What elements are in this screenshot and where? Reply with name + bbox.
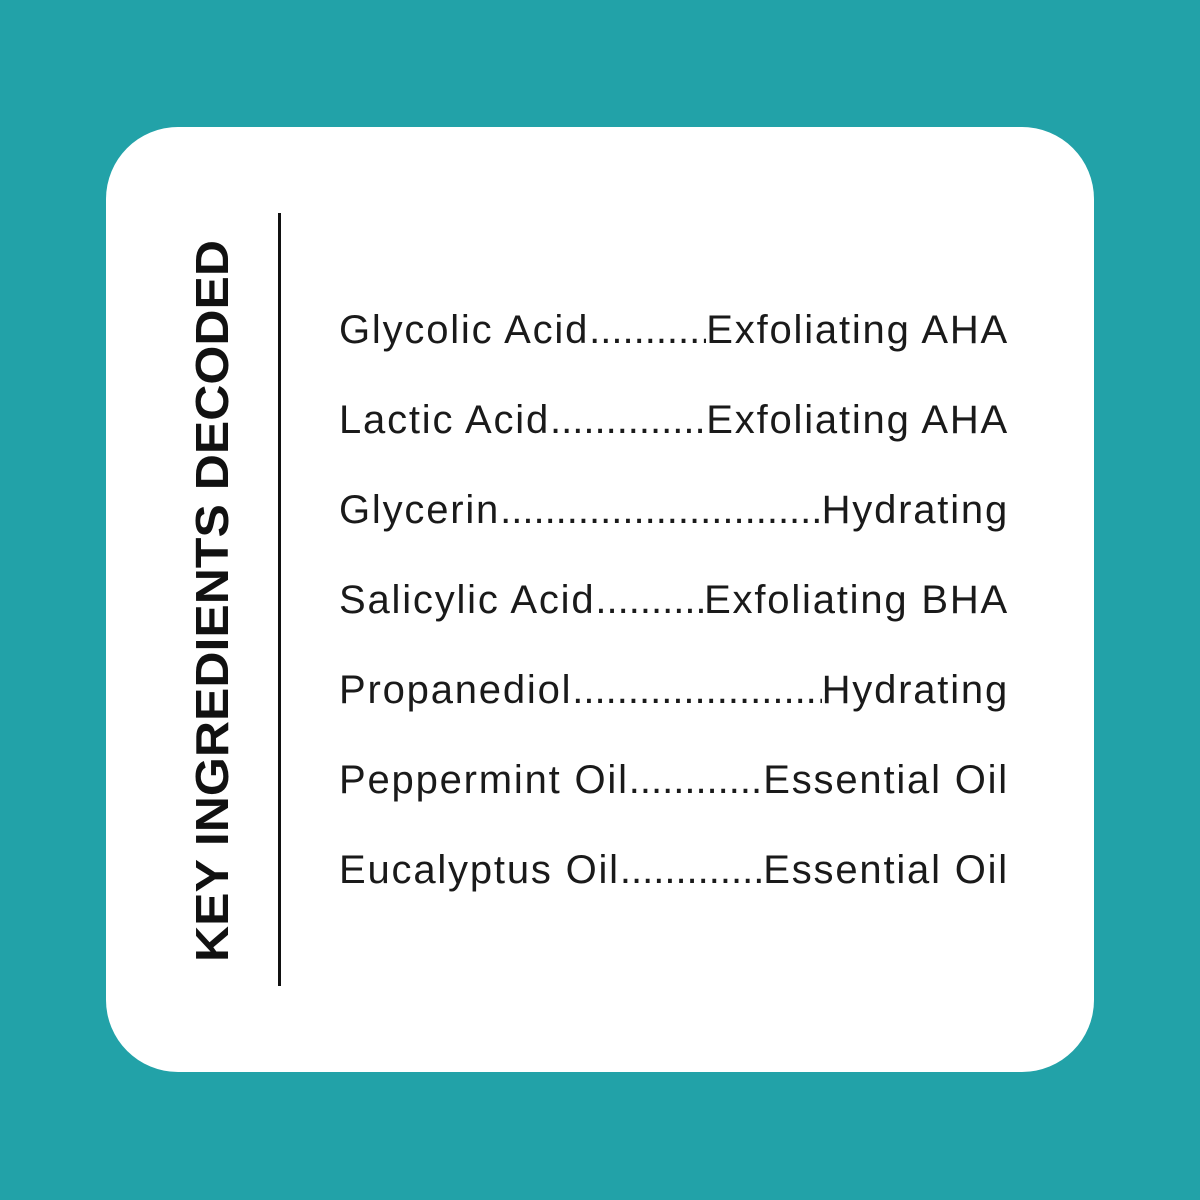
row: propanediol: Propanediol	[339, 668, 572, 712]
row: glycerin: Glycerin	[339, 488, 500, 532]
row: glycolic acid	[339, 308, 1009, 352]
row: propanediol	[339, 668, 1009, 712]
row: propanediol: Hydrating	[822, 668, 1009, 712]
row: glycerin: Hydrating	[822, 488, 1009, 532]
heading: vertical title: KEY INGREDIENTS DECODED	[186, 240, 238, 962]
row: salicylic acid	[339, 578, 1009, 622]
row: peppermint oil: Peppermint Oil	[339, 758, 629, 802]
row: glycerin	[339, 488, 1009, 532]
row: glycolic acid: Glycolic Acid	[339, 308, 589, 352]
row: salicylic acid: Exfoliating BHA	[704, 578, 1009, 622]
ingredient list	[339, 308, 1009, 892]
panel: card	[106, 127, 1094, 1072]
row: eucalyptus oil: Eucalyptus Oil	[339, 848, 620, 892]
row: lactic acid	[339, 398, 1009, 442]
row: lactic acid: Exfoliating AHA	[706, 398, 1009, 442]
row: eucalyptus oil	[339, 848, 1009, 892]
row: eucalyptus oil: Essential Oil	[763, 848, 1009, 892]
row: lactic acid: Lactic Acid	[339, 398, 550, 442]
row: peppermint oil	[339, 758, 1009, 802]
row: glycolic acid: Exfoliating AHA	[706, 308, 1009, 352]
row: salicylic acid: Salicylic Acid	[339, 578, 595, 622]
row: peppermint oil: Essential Oil	[763, 758, 1009, 802]
